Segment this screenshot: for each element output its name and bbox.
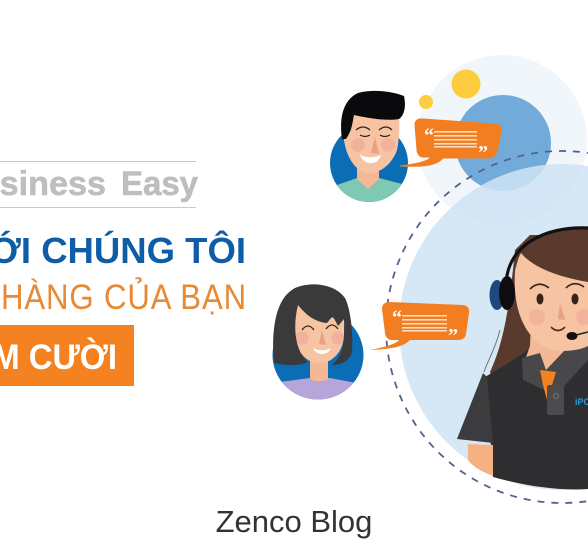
speech bubble: man bbox=[400, 119, 501, 166]
caption: Zenco Blog bbox=[216, 504, 372, 539]
speech bubble: man: “ bbox=[424, 125, 434, 147]
background decorative circles bbox=[386, 55, 588, 503]
brand tagline bbox=[0, 162, 198, 208]
avatar: woman bbox=[272, 284, 364, 401]
speech bubble: woman: ” bbox=[448, 325, 458, 347]
agent: call-centre woman bbox=[457, 228, 588, 489]
speech bubble: woman bbox=[370, 302, 469, 350]
orange highlight banner bbox=[0, 325, 134, 386]
avatar: man bbox=[330, 91, 408, 202]
brand tagline: Easy bbox=[121, 165, 198, 203]
speech bubble: man: ” bbox=[478, 142, 488, 164]
speech bubble: woman: “ bbox=[392, 307, 402, 329]
